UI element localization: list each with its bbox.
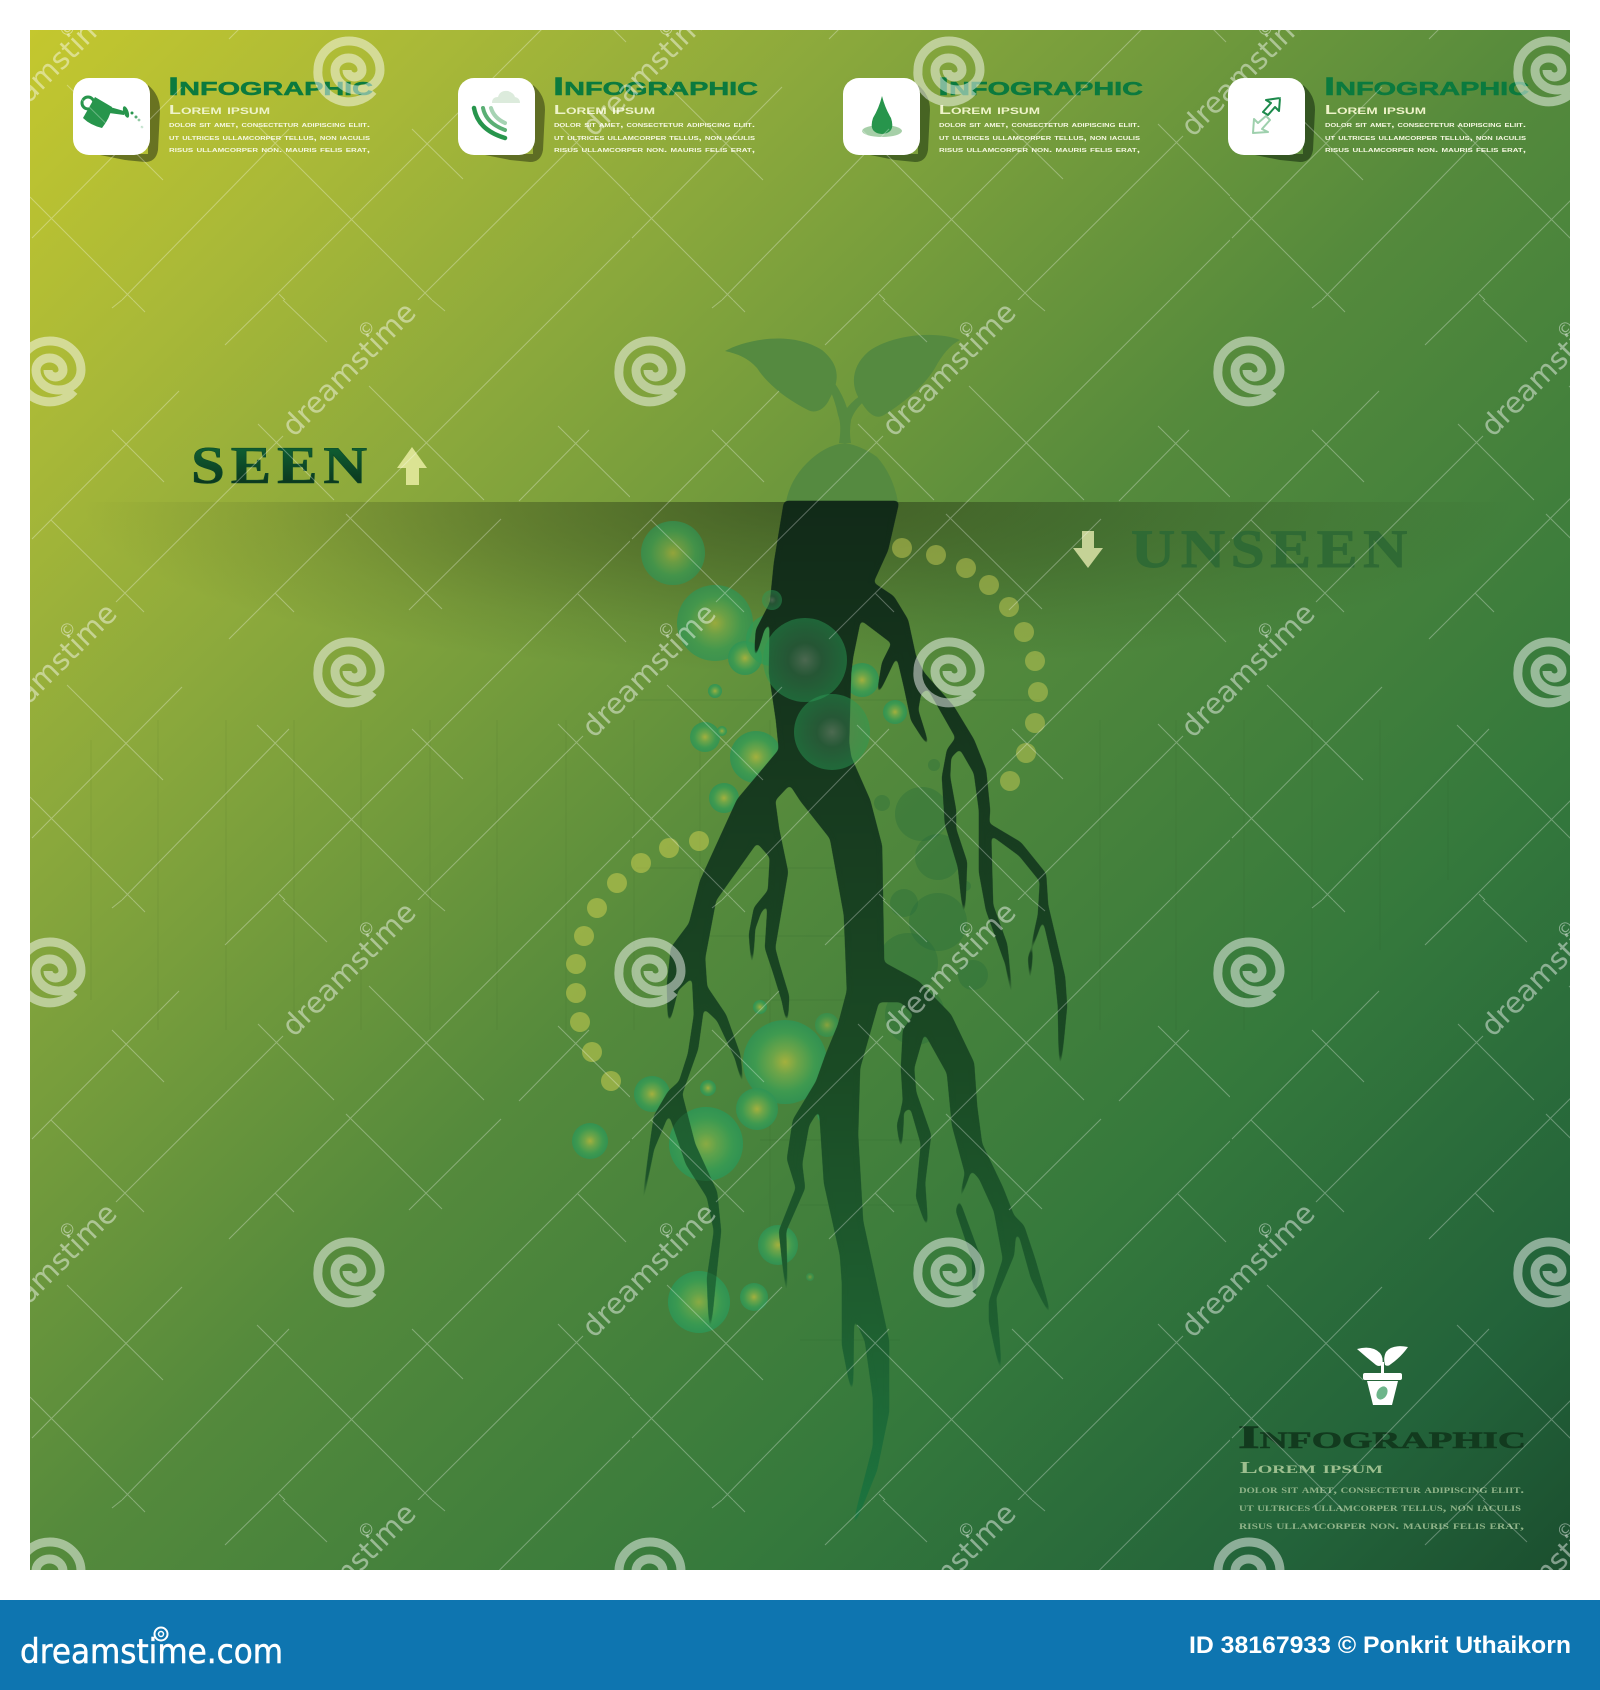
text block 3 [938, 73, 1143, 154]
text block 1: risus ullamcorper non. mauris felis erat, [169, 145, 370, 154]
footer bar [0, 1600, 1600, 1690]
text block: bottom right: dolor sit amet, consectetur adipiscing eliit. [1239, 1484, 1524, 1496]
SEEN heading: SEEN [191, 437, 373, 495]
footer credit: ID 38167933 © Ponkrit Uthaikorn [1189, 1632, 1571, 1659]
text block 4 [1324, 73, 1529, 154]
background faint grid [91, 700, 1448, 1340]
text block 4: ut ultrices ullamcorper tellus, non iaculis [1325, 133, 1527, 142]
watermark overlay: dreamstime words: © [1553, 1517, 1579, 1543]
plant above ground: leaves, stem and tuber top [725, 335, 960, 502]
watermark overlay: dreamstime words: © [954, 916, 980, 942]
text block 4: Infographic [1324, 73, 1529, 101]
watermark overlay: dreamstime words: dreamstime [275, 1496, 423, 1644]
watermark overlay: dreamstime words: dreamstime [575, 1196, 723, 1344]
text block: bottom right: risus ullamcorper non. mauris felis erat, [1239, 1520, 1524, 1532]
text block 2: ut ultrices ullamcorper tellus, non iaculis [554, 133, 756, 142]
watermark overlay: dreamstime words: dreamstime [575, 596, 723, 744]
icon: watering can [82, 97, 143, 128]
text block 3: Lorem ipsum [939, 102, 1040, 117]
watermark overlay: dreamstime words: © [954, 316, 980, 342]
icon: diagonal arrows [1253, 98, 1280, 133]
watermark overlay: dreamstime words: © [354, 316, 380, 342]
text block 2: dolor sit amet, consectetur adipiscing eliit. [554, 120, 755, 129]
text block 1: Lorem ipsum [169, 102, 270, 117]
text block 1: ut ultrices ullamcorper tellus, non iaculis [169, 133, 371, 142]
card 1 with watering can icon [73, 78, 160, 162]
arrow up [397, 447, 427, 485]
ground shadow below soil line [189, 502, 1356, 638]
UNSEEN heading: UNSEEN [1131, 519, 1413, 579]
watermark overlay: dreamstime words: © [55, 16, 81, 42]
watermark overlay: dreamstime words: © [1253, 1217, 1279, 1243]
text block 2: Lorem ipsum [554, 102, 655, 117]
footer logo: dreamstime.com [20, 1632, 283, 1672]
text block 2: risus ullamcorper non. mauris felis erat, [554, 145, 755, 154]
watermark overlay: dreamstime words: © [354, 916, 380, 942]
text block 4: risus ullamcorper non. mauris felis erat, [1325, 145, 1526, 154]
watermark overlay: dreamstime words: © [654, 1217, 680, 1243]
text block 3: ut ultrices ullamcorper tellus, non iaculis [939, 133, 1141, 142]
watermark overlay: dreamstime words: dreamstime [275, 895, 423, 1043]
text block: bottom right: Lorem ipsum [1240, 1458, 1383, 1477]
text block 3: Infographic [938, 73, 1143, 101]
watermark overlay: dreamstime words: © [55, 1217, 81, 1243]
card 2 with signal icon [458, 78, 545, 162]
watermark overlay: dreamstime words: © [654, 16, 680, 42]
text block 1 [168, 73, 373, 154]
card 3 with water drop icon [843, 78, 930, 162]
watermark overlay: dreamstime words: dreamstime [875, 295, 1023, 443]
watermark overlay: dreamstime words: © [1253, 617, 1279, 643]
watermark overlay: dreamstime words: © [1253, 16, 1279, 42]
text block 4: dolor sit amet, consectetur adipiscing eliit. [1325, 120, 1526, 129]
watermark overlay: dreamstime words: © [954, 1517, 980, 1543]
icon: water drop [862, 96, 902, 137]
text block: bottom right: Infographic [1238, 1420, 1526, 1456]
text block: bottom right: ut ultrices ullamcorper tellus, non iaculis [1239, 1502, 1522, 1514]
text block 1: dolor sit amet, consectetur adipiscing eliit. [169, 120, 370, 129]
watermark overlay: dreamstime words: © [55, 617, 81, 643]
text block: bottom right [1238, 1420, 1526, 1532]
watermark overlay: dreamstime words: dreamstime [275, 295, 423, 443]
text block 2: Infographic [553, 73, 758, 101]
watermark overlay: dreamstime words: © [1553, 916, 1579, 942]
bubbles: over the root [668, 590, 870, 1333]
watermark overlay: dreamstime words: © [1553, 316, 1579, 342]
card 4 with arrows icon [1228, 78, 1315, 162]
watermark overlay: dreamstime words: dreamstime [875, 895, 1023, 1043]
text block 3: dolor sit amet, consectetur adipiscing eliit. [939, 120, 1140, 129]
root silhouette [641, 502, 1066, 1527]
watermark overlay: dreamstime words: dreamstime [1174, 1196, 1322, 1344]
icon: cloud and signal arcs [474, 91, 520, 138]
text block 3: risus ullamcorper non. mauris felis erat, [939, 145, 1140, 154]
dotted arc: right [892, 538, 1048, 791]
arrow down [1073, 531, 1103, 568]
watermark overlay: dreamstime words: © [354, 1517, 380, 1543]
watermark overlay: dreamstime words: dreamstime [875, 1496, 1023, 1644]
bubbles: behind the root [572, 521, 988, 1333]
watermark overlay: dreamstime words: © [654, 617, 680, 643]
text block 2 [553, 73, 758, 154]
dotted arc: left [566, 831, 709, 1091]
icon: plant in pot [1357, 1346, 1408, 1405]
text block 1: Infographic [168, 73, 373, 101]
text block 4: Lorem ipsum [1325, 102, 1426, 117]
watermark overlay: dreamstime words: dreamstime [1174, 596, 1322, 744]
